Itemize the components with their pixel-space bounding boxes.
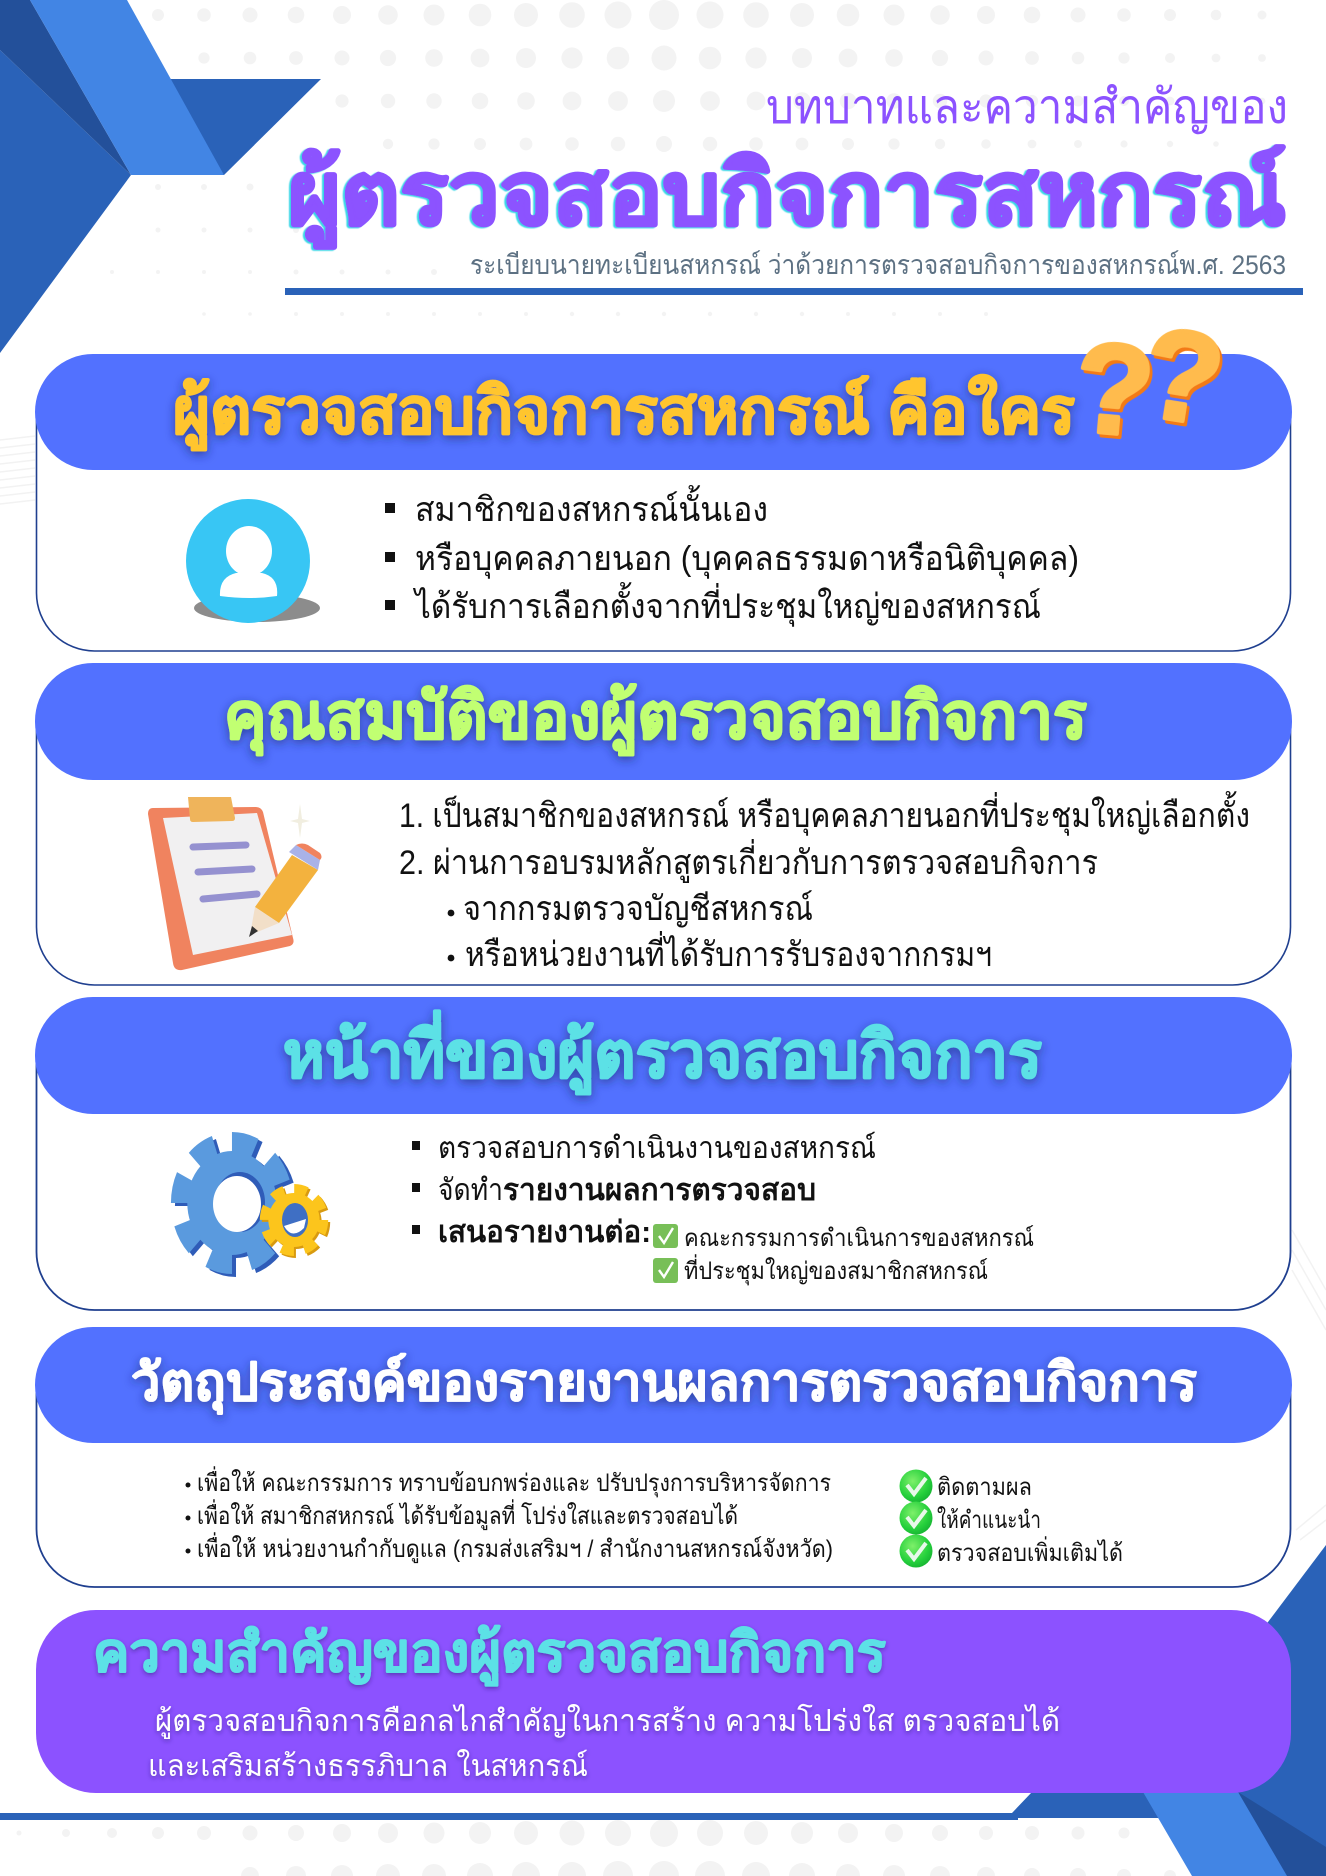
sub-list with check boxes: คณะกรรมการดำเนินการของสหกรณ์	[684, 1224, 1034, 1252]
heading: คุณสมบัติของผู้ตรวจสอบกิจการ	[224, 680, 1087, 756]
heading: หน้าที่ของผู้ตรวจสอบกิจการ	[283, 1010, 1042, 1095]
icon: clipboard and pencil	[148, 797, 322, 970]
header band	[36, 998, 1291, 1113]
card	[36, 1000, 1290, 1310]
icon: green check	[900, 1470, 932, 1502]
decoration: bottom-right blue geometric shapes	[1012, 1545, 1326, 1876]
list: รายงานผลการตรวจสอบ	[503, 1174, 816, 1207]
check list	[900, 1470, 1123, 1568]
list: ได้รับการเลือกตั้งจากที่ประชุมใหญ่ของสหกรณ์	[412, 582, 1041, 627]
list: หรือบุคคลภายนอก (บุคคลธรรมดาหรือนิติบุคคล)	[415, 540, 1079, 579]
list: ตรวจสอบการดำเนินงานของสหกรณ์	[438, 1131, 876, 1165]
list: จัดทำ	[438, 1174, 503, 1207]
icon: check box	[653, 1258, 678, 1283]
sub-list with check boxes	[653, 1224, 1034, 1286]
panel: duties	[36, 998, 1291, 1310]
background halftone dots: top	[110, 0, 1266, 316]
list: เสนอรายงานต่อ:	[438, 1216, 651, 1249]
icon: gears	[180, 1143, 324, 1266]
bottom rule	[0, 1813, 1018, 1820]
icon: green check	[900, 1534, 932, 1568]
check list: ให้คำแนะนำ	[937, 1506, 1041, 1534]
panel: importance	[36, 1610, 1291, 1793]
purple card	[36, 1610, 1291, 1793]
list: จากกรมตรวจบัญชีสหกรณ์	[463, 890, 813, 928]
list: หรือหน่วยงานที่ได้รับการรับรองจากกรมฯ	[465, 931, 992, 974]
check list: ตรวจสอบเพิ่มเติมได้	[937, 1536, 1123, 1567]
card	[36, 357, 1290, 651]
card	[36, 666, 1290, 985]
panel: who is the auditor	[36, 300, 1291, 651]
list	[399, 791, 1250, 974]
decoration: top-left blue geometric shapes	[0, 0, 321, 353]
title line 2: ผู้ตรวจสอบกิจการสหกรณ์	[288, 144, 1286, 249]
purpose list: เพื่อให้ หน่วยงานกำกับดูแล (กรมส่งเสริมฯ / สำนักงานสหกรณ์จังหวัด)	[197, 1532, 833, 1564]
icon: question marks: ?	[1133, 300, 1233, 454]
heading: ผู้ตรวจสอบกิจการสหกรณ์ คือใคร	[173, 374, 1075, 451]
icon: green check	[900, 1502, 932, 1534]
faint wave decoration	[0, 436, 1326, 1540]
purpose list	[186, 1466, 833, 1564]
purpose list: เพื่อให้ สมาชิกสหกรณ์ ได้รับข้อมูลที่ โปร่งใสและตรวจสอบได้	[197, 1499, 738, 1531]
icon: question marks	[1069, 300, 1233, 465]
heading: วัตถุประสงค์ของรายงานผลการตรวจสอบกิจการ	[131, 1353, 1197, 1415]
heading: ความสำคัญของผู้ตรวจสอบกิจการ	[93, 1623, 886, 1686]
panel: qualifications	[36, 664, 1291, 985]
header band	[36, 355, 1291, 469]
purpose list: เพื่อให้ คณะกรรมการ ทราบข้อบกพร่องและ ปรับปรุงการบริหารจัดการ	[197, 1466, 831, 1498]
header band	[36, 664, 1291, 779]
card	[36, 1330, 1290, 1587]
sub-list with check boxes: ที่ประชุมใหญ่ของสมาชิกสหกรณ์	[684, 1254, 988, 1286]
icon: check box	[653, 1224, 678, 1248]
header band	[36, 1328, 1291, 1442]
panel: report objectives	[36, 1328, 1291, 1587]
check list: ติดตามผล	[937, 1474, 1032, 1501]
title block	[285, 81, 1303, 295]
list	[412, 1131, 876, 1249]
background halftone dots: bottom	[16, 1819, 1176, 1876]
list: สมาชิกของสหกรณ์นั้นเอง	[415, 485, 768, 529]
panel: importance: และเสริมสร้างธรรภิบาล ในสหกรณ์	[148, 1749, 588, 1783]
icon: person avatar	[186, 499, 320, 623]
icon: question marks: ?	[1069, 315, 1159, 465]
list	[385, 485, 1079, 627]
title line 1: บทบาทและความสำคัญของ	[766, 81, 1288, 134]
title rule	[285, 288, 1303, 295]
body text: ผู้ตรวจสอบกิจการคือกลไกสำคัญในการสร้าง ความโปร่งใส ตรวจสอบได้	[155, 1703, 1060, 1739]
list: 2. ผ่านการอบรมหลักสูตรเกี่ยวกับการตรวจสอบกิจการ	[399, 839, 1098, 883]
